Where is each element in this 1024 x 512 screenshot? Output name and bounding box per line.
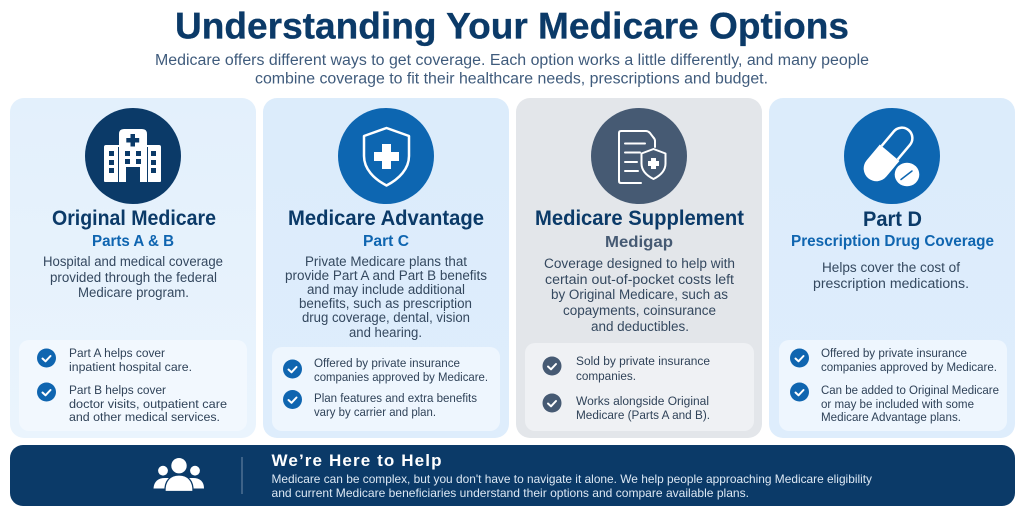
check icon xyxy=(790,348,809,368)
description: drug coverage, dental, vision xyxy=(302,310,470,325)
subheading: Parts A & B xyxy=(92,233,174,250)
bullet text xyxy=(821,346,999,424)
card background xyxy=(263,98,509,438)
check icon xyxy=(37,348,56,368)
benefits box xyxy=(272,347,500,431)
bullet text xyxy=(69,346,227,424)
heading: Original Medicare xyxy=(52,207,216,230)
title: Understanding Your Medicare Options xyxy=(175,6,849,46)
bullet text: doctor visits, outpatient care xyxy=(69,397,227,411)
description: provided through the federal xyxy=(50,270,217,285)
description: provide Part A and Part B benefits xyxy=(285,268,487,283)
description: Medicare program. xyxy=(78,285,189,300)
icon: document with shield xyxy=(591,108,687,204)
subheading: Part C xyxy=(363,233,409,250)
bullet text: Works alongside Original xyxy=(576,394,709,408)
check icon xyxy=(790,382,809,402)
description: and may include additional xyxy=(307,282,465,297)
description xyxy=(285,254,487,340)
bullet text: Medicare Advantage plans. xyxy=(821,410,961,424)
check icon xyxy=(283,360,302,378)
bullet text: Part B helps cover xyxy=(69,383,166,397)
check icon xyxy=(542,394,562,412)
intro text: Medicare offers different ways to get coverage. Each option works a little differently, and many people xyxy=(155,52,869,69)
bullet text: Can be added to Original Medicare xyxy=(821,383,999,397)
bullet text: vary by carrier and plan. xyxy=(314,405,436,419)
description: Coverage designed to help with xyxy=(544,256,735,271)
bullet text: Medicare (Parts A and B). xyxy=(576,408,710,422)
card background xyxy=(769,98,1015,438)
panel: Medicare Supplement xyxy=(516,98,762,438)
intro text: combine coverage to fit their healthcare needs, prescriptions and budget. xyxy=(255,70,768,88)
description xyxy=(813,260,969,291)
description: Private Medicare plans that xyxy=(305,254,467,269)
subheading: Medigap xyxy=(605,234,673,251)
bullet text: Part A helps cover xyxy=(69,346,165,360)
benefits box xyxy=(779,340,1007,431)
banner body: Medicare can be complex, but you don't have to navigate it alone. We help people approaching Medicare eligibility xyxy=(272,472,872,486)
icon: hospital xyxy=(85,108,181,204)
heading: Medicare Advantage xyxy=(288,207,484,230)
icon: shield with cross xyxy=(338,108,434,204)
description: Hospital and medical coverage xyxy=(43,254,223,269)
heading: Medicare Supplement xyxy=(535,207,744,230)
bullet text: companies approved by Medicare. xyxy=(314,370,488,384)
description: by Original Medicare, such as xyxy=(551,287,728,302)
bullet text: Offered by private insurance xyxy=(821,346,967,360)
benefits box xyxy=(19,340,247,431)
bullet text: Offered by private insurance xyxy=(314,356,460,370)
bullet text: Plan features and extra benefits xyxy=(314,391,477,405)
bullet text: companies approved by Medicare. xyxy=(821,360,997,374)
banner body: and current Medicare beneficiaries understand their options and compare available plans. xyxy=(272,486,749,500)
intro text xyxy=(155,52,869,88)
panel: Part D xyxy=(769,98,1015,438)
description: Helps cover the cost of xyxy=(822,260,960,275)
description: certain out-of-pocket costs left xyxy=(545,272,734,287)
description xyxy=(544,256,735,334)
card background xyxy=(10,98,256,438)
icon: capsule and tablet xyxy=(844,108,940,204)
bullet text xyxy=(576,354,710,422)
bullet text: inpatient hospital care. xyxy=(69,360,192,374)
heading: Part D xyxy=(863,208,922,231)
description: benefits, such as prescription xyxy=(299,296,472,311)
panel: Medicare Advantage xyxy=(263,98,509,438)
description: and deductibles. xyxy=(591,319,689,334)
bullet text: or may be included with some xyxy=(821,397,974,411)
benefits box xyxy=(525,343,754,431)
card background xyxy=(516,98,762,438)
subheading: Prescription Drug Coverage xyxy=(791,233,994,250)
description: prescription medications. xyxy=(813,276,969,291)
help banner xyxy=(10,445,1015,506)
bullet text: companies. xyxy=(576,369,636,383)
bullet text: Sold by private insurance xyxy=(576,354,710,368)
banner body xyxy=(272,472,872,500)
banner heading: We’re Here to Help xyxy=(272,451,442,470)
check icon xyxy=(37,382,56,402)
description: and hearing. xyxy=(349,325,422,340)
check icon xyxy=(283,390,302,409)
panel: Original Medicare xyxy=(10,98,256,438)
check icon xyxy=(542,356,562,376)
bullet text xyxy=(314,356,488,419)
description: copayments, coinsurance xyxy=(563,303,716,318)
icon: people xyxy=(154,458,204,492)
description xyxy=(43,254,223,300)
bullet text: and other medical services. xyxy=(69,410,220,424)
